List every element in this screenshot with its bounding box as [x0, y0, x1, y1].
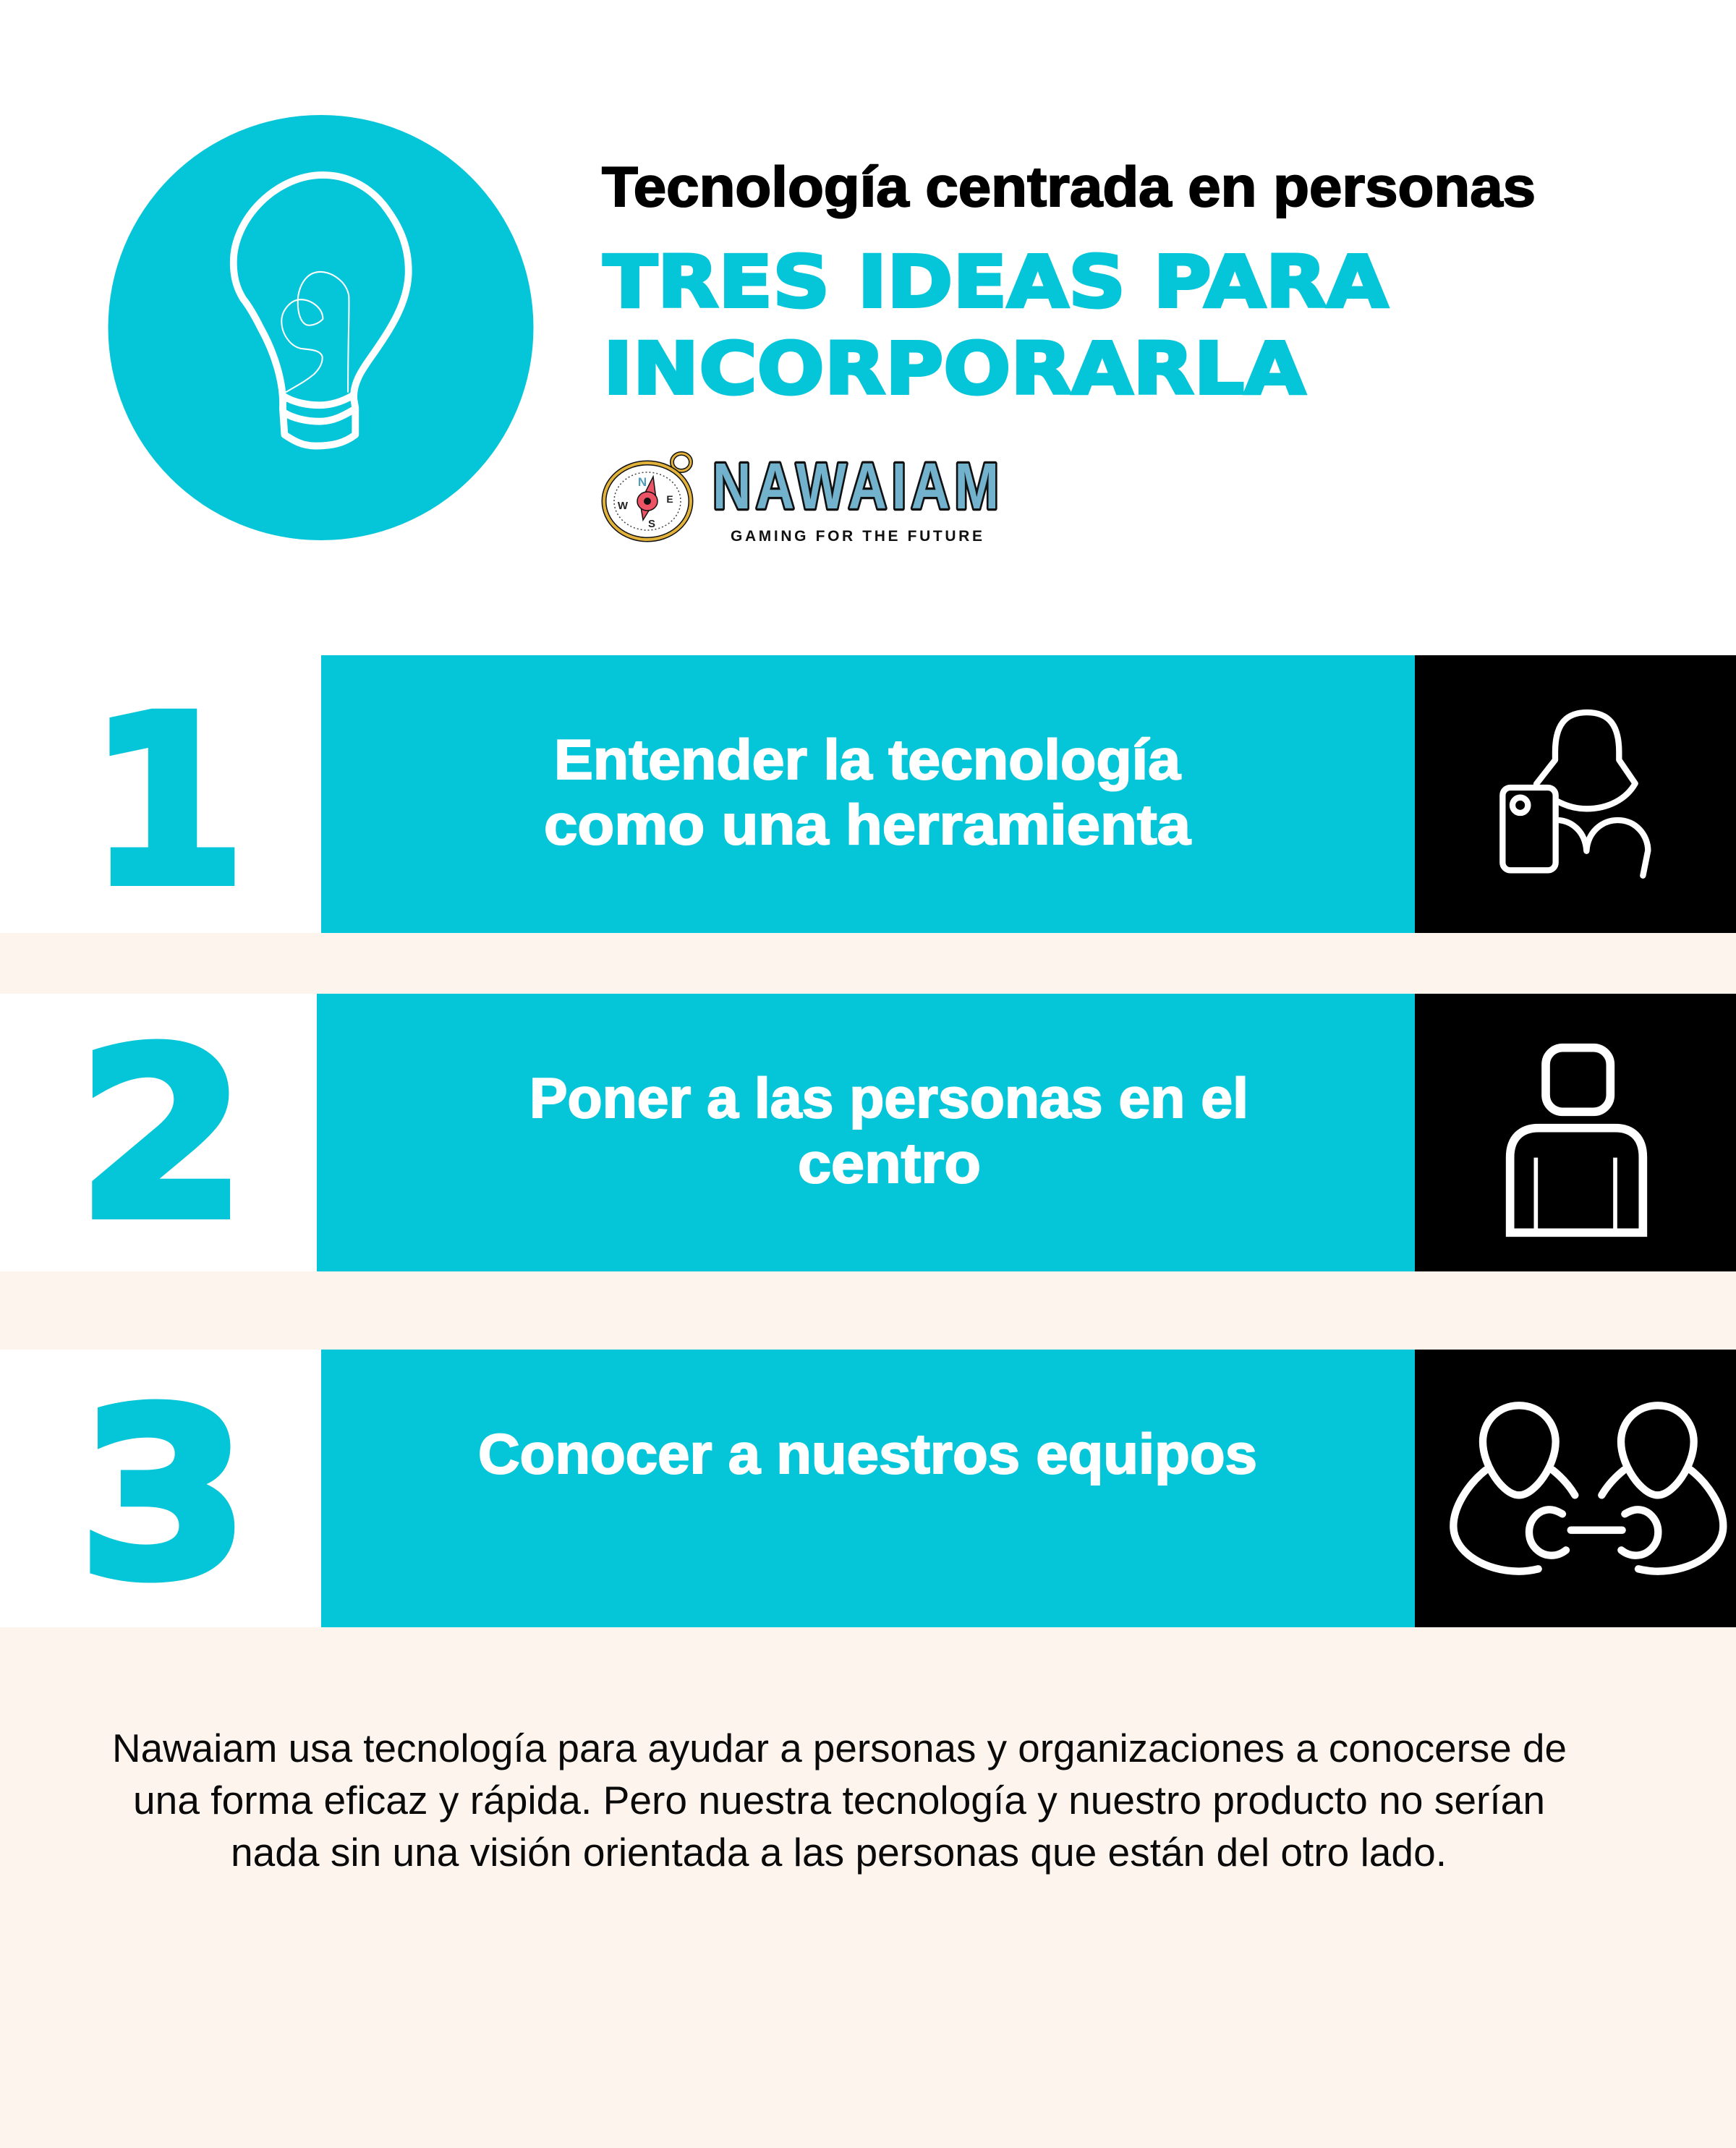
panel: idea 2	[0, 994, 1736, 1271]
text: Conocer a nuestros equipos: Conocer a nuestros equipos	[478, 1422, 1257, 1486]
icon: light bulb in teal circle	[109, 115, 534, 540]
text block: closing paragraph: nada sin una visión orientada a las personas que están del otro lado.	[231, 1830, 1447, 1875]
icon: compass: N	[638, 475, 647, 489]
panel: idea 3	[0, 1350, 1736, 1630]
icon: compass	[604, 453, 691, 540]
logo: Nawaiam	[604, 451, 1004, 545]
text: Poner a las personas en el centro: Poner a las personas en el	[529, 1066, 1248, 1130]
number 1: 1	[88, 668, 246, 937]
icon: person	[1510, 1048, 1643, 1232]
icon: compass: S	[648, 518, 655, 530]
tagline: Gaming for the future: GAMING FOR THE FUTURE	[731, 528, 982, 545]
text: Poner a las personas en el centro	[529, 1066, 1248, 1195]
panel: idea 1	[0, 655, 1736, 937]
text block: closing paragraph: Nawaiam usa tecnología para ayudar a personas y organizaciones a conocerse de	[112, 1726, 1567, 1770]
number 3: 3	[78, 1361, 250, 1630]
wordmark: NAWAIAM: NAWAIAM	[712, 451, 1004, 523]
icon: person with phone	[1502, 712, 1648, 876]
subtitle: Tecnología centrada en personas: Tecnología centrada en personas	[602, 155, 1536, 218]
title: TRES IDEAS PARA INCORPORARLA: TRES IDEAS PARA	[603, 241, 1388, 324]
text: Entender la tecnología como una herramienta	[544, 728, 1191, 856]
text: Entender la tecnología como una herramienta: como una herramienta	[544, 793, 1191, 856]
number 2: 2	[77, 1001, 247, 1270]
text: Poner a las personas en el centro: centro	[798, 1131, 981, 1195]
icon: two people connected	[1453, 1405, 1723, 1572]
text block: closing paragraph	[112, 1726, 1567, 1875]
text block: closing paragraph: una forma eficaz y rápida. Pero nuestra tecnología y nuestro producto no serían	[133, 1778, 1545, 1823]
icon: compass: E	[666, 493, 673, 505]
title: TRES IDEAS PARA INCORPORARLA	[603, 241, 1388, 411]
title: TRES IDEAS PARA INCORPORARLA: INCORPORARLA	[603, 328, 1306, 411]
icon: compass: W	[618, 500, 629, 512]
text: Entender la tecnología como una herramienta: Entender la tecnología	[554, 728, 1181, 791]
